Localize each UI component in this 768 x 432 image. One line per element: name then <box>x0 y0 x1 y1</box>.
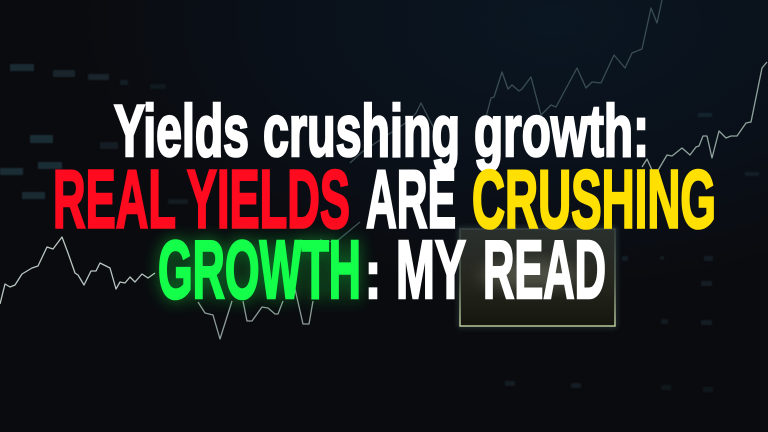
title line 3: READ <box>483 223 606 316</box>
title line 3: MY <box>396 223 466 316</box>
line chart: lower middle trend <box>198 222 360 339</box>
title line 1 <box>114 91 649 172</box>
line chart: right trend <box>642 62 767 172</box>
faint data labels <box>0 64 759 392</box>
line chart: dim upper trend <box>350 0 662 163</box>
line chart: bright left trend <box>0 237 155 304</box>
title line 1: growth: <box>474 91 649 172</box>
title <box>53 91 716 316</box>
title line 2: REAL YIELDS <box>53 152 350 246</box>
title line 3: GROWTH <box>158 223 361 316</box>
highlight box <box>460 229 615 326</box>
title line 3: GROWTH <box>158 223 361 316</box>
title line 3: : <box>365 237 381 313</box>
title line 1: crushing <box>263 91 460 172</box>
title line 1: Yields <box>114 91 249 172</box>
title line 2: ARE <box>366 152 456 246</box>
